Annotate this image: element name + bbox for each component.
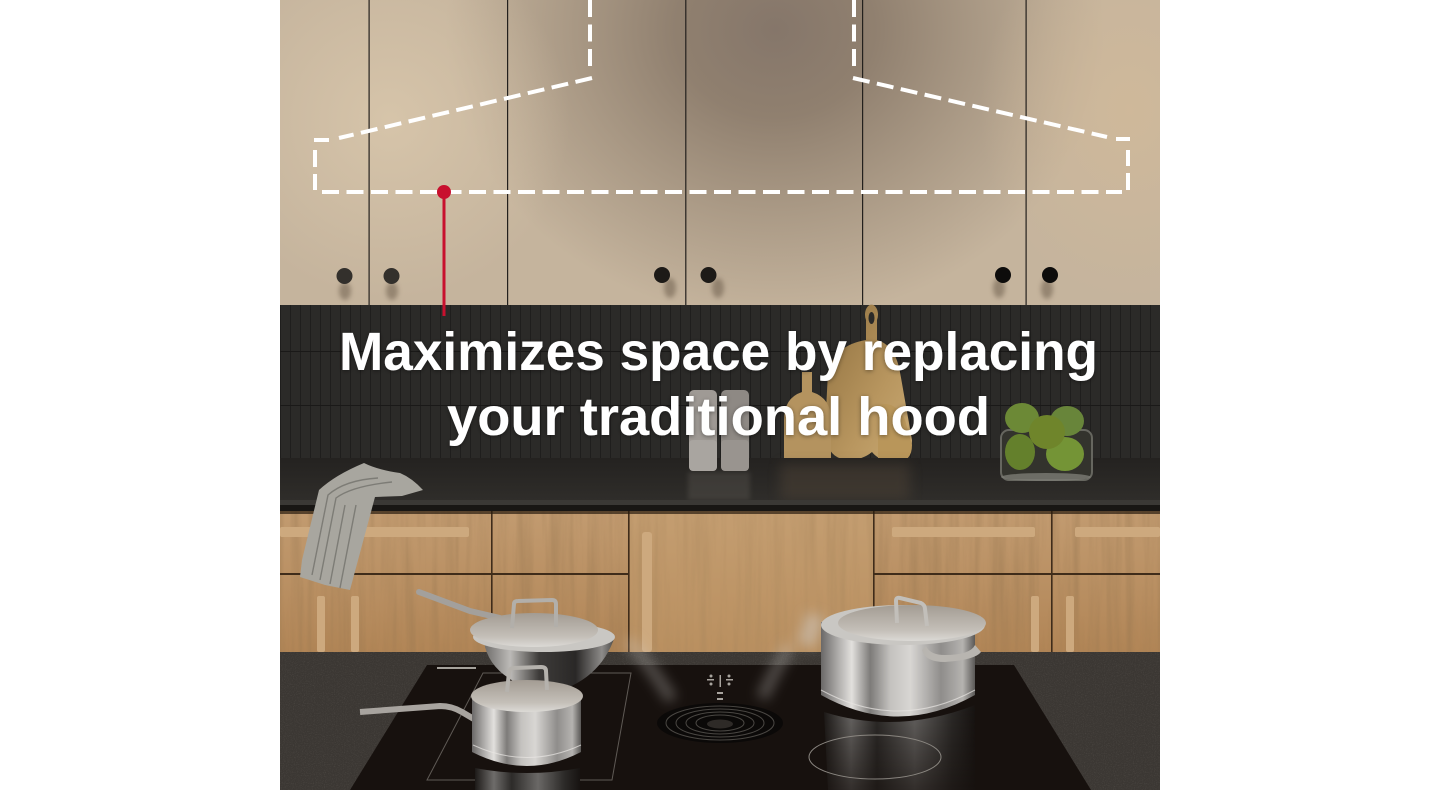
island counter (280, 652, 1160, 790)
pot: front saucepan (360, 667, 583, 790)
headline: your traditional hood (447, 387, 990, 447)
pot: large stock pot (809, 598, 986, 790)
cabinet knobs (336, 267, 1058, 300)
dashed hood outline (314, 0, 1130, 192)
counter top (280, 458, 1160, 511)
backsplash tiles (280, 305, 1160, 460)
infographic scene (280, 0, 1160, 790)
headline (339, 322, 1098, 447)
lower wood cabinets (280, 511, 1160, 653)
bowl of green apples (1001, 403, 1092, 481)
cooktop controls (707, 674, 733, 700)
headline: Maximizes space by replacing (339, 322, 1098, 382)
kitchen photograph (280, 0, 1160, 790)
pot: back saucepan (419, 592, 615, 694)
cutting boards (784, 305, 912, 462)
dish towel (300, 463, 423, 590)
steam (628, 615, 815, 700)
salt and pepper shakers (689, 390, 749, 471)
upper cabinets (280, 0, 1160, 305)
induction cooktop (350, 665, 1091, 790)
red callout pin (437, 185, 451, 316)
downdraft vent (657, 703, 783, 743)
